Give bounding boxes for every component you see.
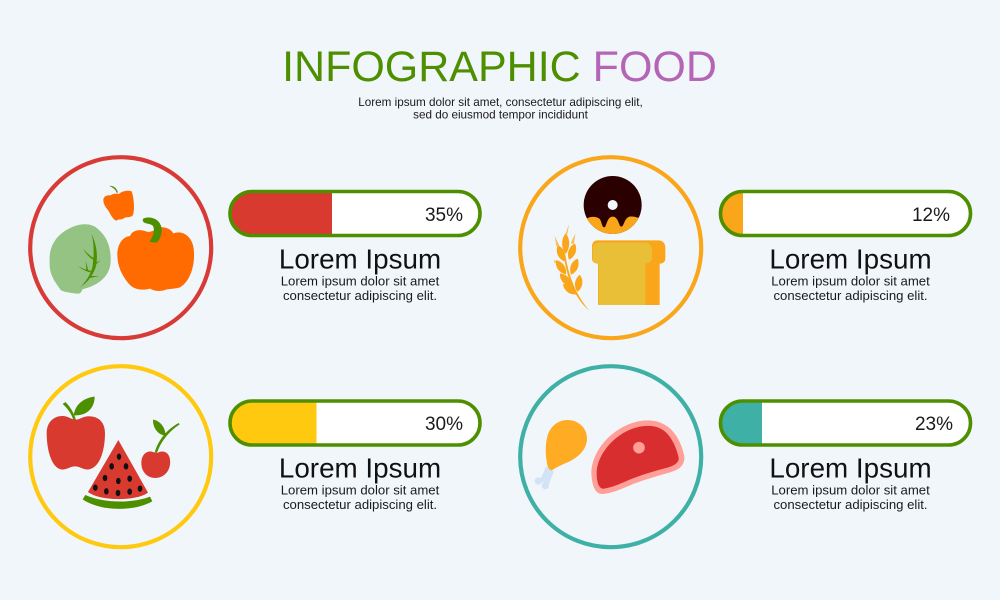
text block: Lorem ipsum dolor sit amet bbox=[771, 482, 930, 498]
text block: Lorem ipsum dolor sit amet bbox=[281, 482, 440, 498]
text block: consectetur adipiscing elit. bbox=[283, 497, 437, 512]
text block bbox=[279, 244, 441, 303]
progress bar 35%: 35% bbox=[425, 205, 463, 226]
icon: meat bbox=[535, 420, 684, 494]
text block: Lorem Ipsum bbox=[769, 244, 932, 274]
progress bar 23% bbox=[718, 398, 970, 448]
text block bbox=[769, 452, 932, 512]
progress bar 35% bbox=[228, 189, 480, 239]
panel: vegetables bbox=[30, 157, 480, 338]
panel: fruit bbox=[30, 366, 480, 547]
text block bbox=[769, 244, 932, 303]
progress bar 30%: 30% bbox=[425, 414, 463, 435]
progress bar 30% bbox=[228, 398, 480, 448]
text block: consectetur adipiscing elit. bbox=[283, 288, 437, 303]
text block bbox=[279, 452, 441, 512]
icon ring: vegetables bbox=[30, 157, 211, 338]
text block: consectetur adipiscing elit. bbox=[773, 288, 928, 303]
icon: vegetables bbox=[50, 186, 194, 294]
title: INFOGRAPHIC FOOD bbox=[282, 43, 717, 91]
subtitle: Lorem ipsum dolor sit amet, consectetur adipiscing elit, bbox=[358, 96, 643, 109]
text block: Lorem Ipsum bbox=[279, 452, 441, 484]
text block: Lorem Ipsum bbox=[279, 244, 441, 274]
progress bar 12%: 12% bbox=[912, 205, 950, 226]
text block: Lorem ipsum dolor sit amet bbox=[771, 274, 930, 288]
panel: bakery bbox=[520, 157, 970, 338]
icon: wheat bbox=[553, 224, 589, 311]
icon ring: meat bbox=[520, 366, 701, 547]
icon: donut and bread bbox=[584, 176, 665, 305]
progress bar 12% bbox=[718, 189, 970, 239]
icon ring: fruit bbox=[30, 366, 211, 547]
icon: fruit bbox=[47, 397, 180, 509]
subtitle: sed do eiusmod tempor incididunt bbox=[413, 108, 589, 122]
text block: Lorem Ipsum bbox=[769, 452, 932, 484]
icon ring: bakery bbox=[520, 157, 701, 338]
text block: Lorem ipsum dolor sit amet bbox=[281, 274, 440, 288]
text block: consectetur adipiscing elit. bbox=[773, 497, 928, 512]
progress bar 23%: 23% bbox=[915, 414, 953, 435]
panel: meat bbox=[520, 366, 970, 547]
